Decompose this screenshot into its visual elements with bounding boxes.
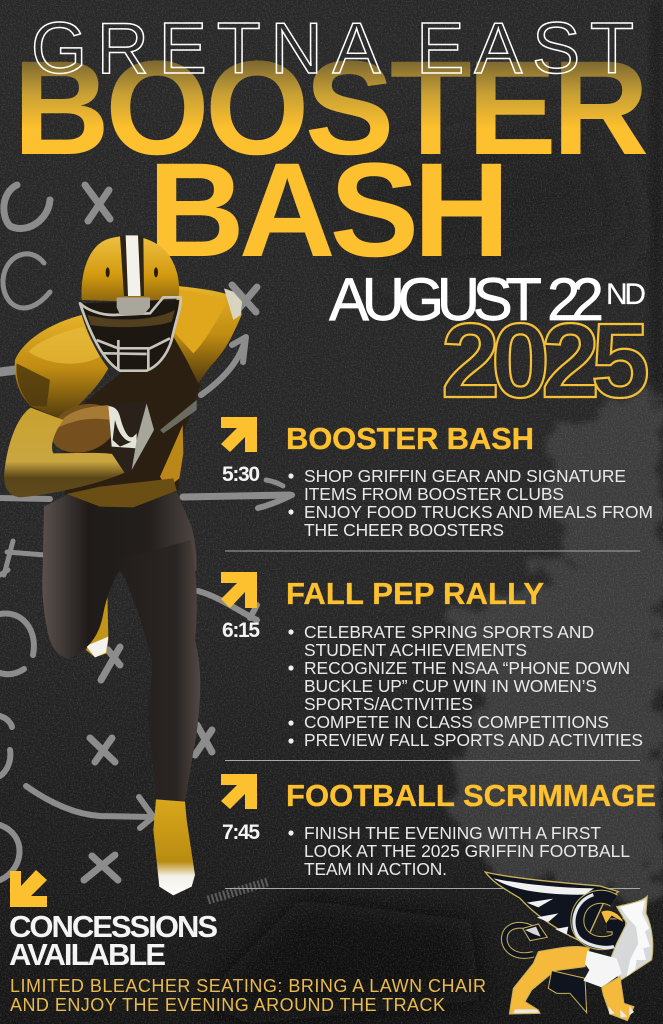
bullet list (288, 622, 643, 750)
bullet list: SPORTS/ACTIVITIES (304, 694, 473, 714)
arrow icon (221, 572, 257, 608)
section 1: Booster Bash (221, 417, 653, 540)
bullet list: LOOK AT THE 2025 GRIFFIN FOOTBALL (304, 841, 630, 861)
bullet list: TEAM IN ACTION. (304, 859, 447, 879)
front leg and talon (602, 977, 634, 1021)
chalk playbook diagram (0, 185, 292, 900)
tail (504, 925, 542, 956)
concessions heading: AVAILABLE (9, 937, 166, 972)
arrow icon: concessions (10, 870, 47, 907)
concessions heading (9, 909, 218, 972)
bullet list: STUDENT ACHIEVEMENTS (304, 640, 527, 660)
chest (583, 951, 622, 987)
seating note: AND ENJOY THE EVENING AROUND THE TRACK (10, 995, 445, 1015)
facemask (82, 300, 179, 371)
bullet list: PREVIEW FALL SPORTS AND ACTIVITIES (304, 730, 643, 750)
front leg (120, 540, 200, 802)
arrow icon (221, 417, 257, 452)
concessions heading: CONCESSIONS (9, 909, 218, 944)
head and neck (610, 896, 653, 981)
divider (225, 550, 640, 552)
pants: thigh and hips (42, 493, 197, 659)
title: BOOSTER: BOOSTER (13, 34, 649, 183)
date: August 22nd: ND (606, 278, 646, 311)
section 2: Fall Pep Rally (221, 572, 643, 750)
bullet list: COMPETE IN CLASS COMPETITIONS (304, 712, 609, 732)
back gold leg and body (509, 947, 589, 1014)
bullet list: CELEBRATE SPRING SPORTS AND (304, 622, 594, 642)
seating note (10, 976, 486, 1015)
back leg cleat (86, 585, 108, 657)
bullet list: RECOGNIZE THE NSAA “PHONE DOWN (304, 658, 630, 678)
ball (44, 396, 122, 461)
bullet list: ITEMS FROM BOOSTER CLUBS (304, 484, 564, 504)
title: GRETNA EAST: GRETNA EAST (31, 9, 634, 89)
heading: BOOSTER BASH (286, 421, 534, 456)
bullet list (288, 466, 653, 540)
helmet dome (81, 236, 179, 302)
time: 5:30 (222, 463, 260, 486)
time: 6:15 (222, 619, 260, 642)
G ring (577, 897, 619, 943)
year: 2025 outlined: 2025 (441, 302, 650, 420)
heading: FALL PEP RALLY (286, 576, 544, 611)
wing (485, 872, 618, 943)
title: BASH: BASH (148, 136, 510, 285)
bullet list: BUCKLE UP” CUP WIN IN WOMEN’S (304, 676, 597, 696)
bullet list: THE CHEER BOOSTERS (304, 520, 504, 540)
divider (225, 888, 640, 889)
bullet list: SHOP GRIFFIN GEAR AND SIGNATURE (304, 466, 626, 486)
football player running with ball (4, 235, 242, 895)
right shoulder (172, 286, 242, 383)
navy legs (548, 971, 587, 1013)
griffin mascot logo (485, 872, 653, 1021)
left shoulder (15, 315, 108, 420)
arrow icon (221, 774, 257, 809)
glove (108, 402, 154, 473)
jersey torso (63, 330, 200, 507)
date: August 22nd (329, 266, 646, 333)
bullet list: ENJOY FOOD TRUCKS AND MEALS FROM (304, 502, 653, 522)
bullet list: FINISH THE EVENING WITH A FIRST (304, 823, 601, 843)
front cleat (153, 799, 195, 895)
divider (225, 760, 640, 761)
heading: FOOTBALL SCRIMMAGE (286, 778, 656, 813)
date: August 22nd: 22 (547, 266, 604, 333)
bullet list (288, 823, 630, 879)
seating note: LIMITED BLEACHER SEATING: BRING A LAWN CHAIR (10, 976, 486, 996)
time: 7:45 (222, 821, 260, 844)
arm (4, 408, 127, 497)
date: August 22nd: AUGUST (329, 266, 542, 333)
white mane (620, 901, 650, 977)
beak (601, 910, 624, 924)
section 3: Football Scrimmage (221, 774, 656, 879)
